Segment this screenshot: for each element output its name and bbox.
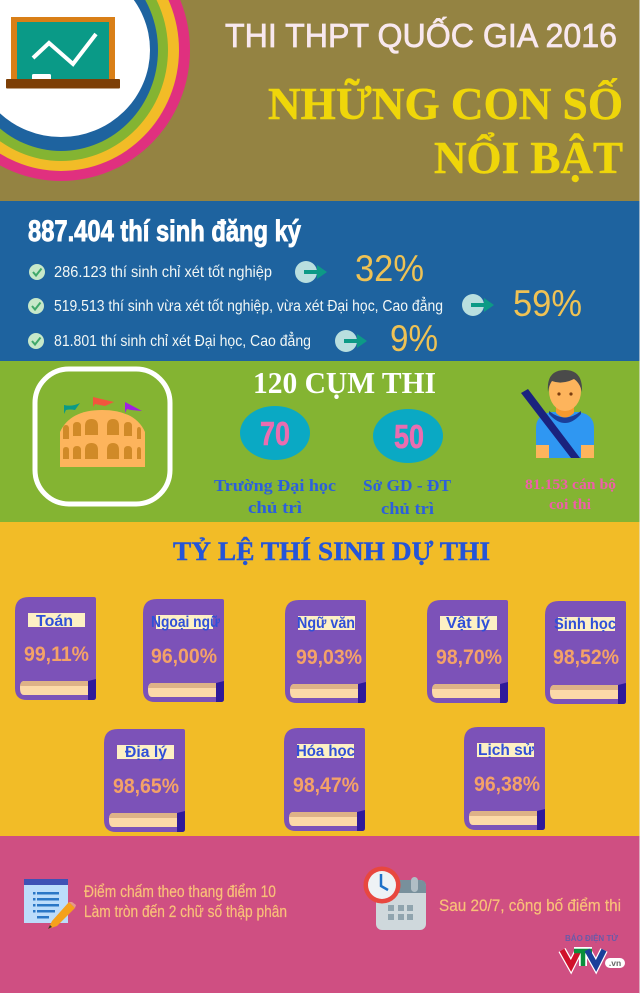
book: Ngoại ngữ: Ngoại ngữ xyxy=(151,614,220,631)
title: exam name: THI THPT QUỐC GIA 2016 xyxy=(225,16,617,54)
panel: header xyxy=(0,0,640,201)
panel: results info xyxy=(0,836,640,993)
book: Ngữ văn xyxy=(285,600,366,703)
icon: coliseum in rounded frame xyxy=(35,369,170,504)
book: Sinh học xyxy=(545,601,626,704)
logo: VTV: BÁO ĐIỆN TỬ xyxy=(565,932,619,943)
book: Ngữ văn: 99,03% xyxy=(296,646,362,669)
book: Vật lý xyxy=(427,600,508,703)
book: Ngữ văn: Ngữ văn xyxy=(297,615,355,632)
stat: 70 universities xyxy=(214,406,336,517)
heading: outstanding numbers: NHỮNG CON SỐ xyxy=(268,77,623,129)
panel: exam clusters xyxy=(0,361,640,522)
book: Địa lý: Địa lý xyxy=(125,744,167,761)
book: Hóa học xyxy=(284,728,365,831)
heading: registered total: 887.404 thí sinh đăng ký xyxy=(28,215,301,248)
row: university only: 81.801 thí sinh chỉ xét Đại học, Cao đẳng xyxy=(54,331,311,350)
panel: registered candidates xyxy=(0,201,640,361)
stat: invigilators xyxy=(525,477,616,513)
book: Sinh học: 98,52% xyxy=(553,646,619,669)
page edge xyxy=(639,0,640,994)
stat: 50 education departments: chủ trì xyxy=(381,499,434,518)
text: results date: Sau 20/7, công bố điểm thi xyxy=(439,897,621,915)
book: Lịch sử xyxy=(464,727,545,830)
stat: 70 universities: chủ trì xyxy=(248,498,302,517)
heading: 120 clusters: 120 CỤM THI xyxy=(253,365,436,400)
text: grading scale: Làm tròn đến 2 chữ số thập phân xyxy=(84,903,287,921)
book: Ngoại ngữ xyxy=(143,599,224,702)
book: Lịch sử: 96,38% xyxy=(474,773,540,796)
row: graduation and university xyxy=(28,283,582,324)
book: Toán: 99,11% xyxy=(24,643,89,666)
icon: document and pencil xyxy=(24,879,76,929)
book: Sinh học: Sinh học xyxy=(554,616,616,633)
stat: invigilators: coi thi xyxy=(549,497,591,513)
book: Ngoại ngữ: 96,00% xyxy=(151,645,217,668)
stat: invigilators: 81.153 cán bộ xyxy=(525,477,616,493)
row: graduation only: 286.123 thí sinh chỉ xét tốt nghiệp xyxy=(54,264,272,281)
book: Toán xyxy=(15,597,96,700)
logo: VTV xyxy=(562,932,625,968)
text: grading scale xyxy=(84,883,287,921)
text: grading scale: Điểm chấm theo thang điểm 10 xyxy=(84,883,276,901)
row: graduation only: 32% xyxy=(355,248,424,289)
book: Toán: Toán xyxy=(36,613,73,630)
logo: VTV: .vn xyxy=(609,958,621,968)
icon: invigilator xyxy=(521,370,594,458)
heading: attendance: TỶ LỆ THÍ SINH DỰ THI xyxy=(173,537,490,566)
book: Hóa học: Hóa học xyxy=(296,743,355,760)
book: Vật lý: 98,70% xyxy=(436,646,502,669)
row: graduation and university: 59% xyxy=(513,283,582,324)
stat: 50 education departments xyxy=(363,409,452,518)
stat: 70 universities: Trường Đại học xyxy=(214,476,336,495)
book: Vật lý: Vật lý xyxy=(446,615,490,632)
stat: 50 education departments: Sở GD - ĐT xyxy=(363,476,452,495)
panel: attendance rates xyxy=(0,522,640,836)
row: graduation and university: 519.513 thí sinh vừa xét tốt nghiệp, vừa xét Đại học, Cao đẳng xyxy=(54,296,443,315)
stat: 70 universities: 70 xyxy=(260,415,290,452)
icon: calendar and clock xyxy=(364,866,426,930)
book: Địa lý: 98,65% xyxy=(113,775,179,798)
row: university only: 9% xyxy=(390,318,438,359)
book: Địa lý xyxy=(104,729,185,832)
icon: rainbow circle with blackboard xyxy=(0,0,190,181)
book: Lịch sử: Lịch sử xyxy=(478,742,534,759)
row: university only xyxy=(28,318,438,359)
row: graduation only xyxy=(29,248,424,289)
heading: outstanding numbers: NỔI BẬT xyxy=(434,130,623,183)
stat: 50 education departments: 50 xyxy=(394,418,424,455)
heading: outstanding numbers xyxy=(268,77,623,183)
book: Hóa học: 98,47% xyxy=(293,774,359,797)
